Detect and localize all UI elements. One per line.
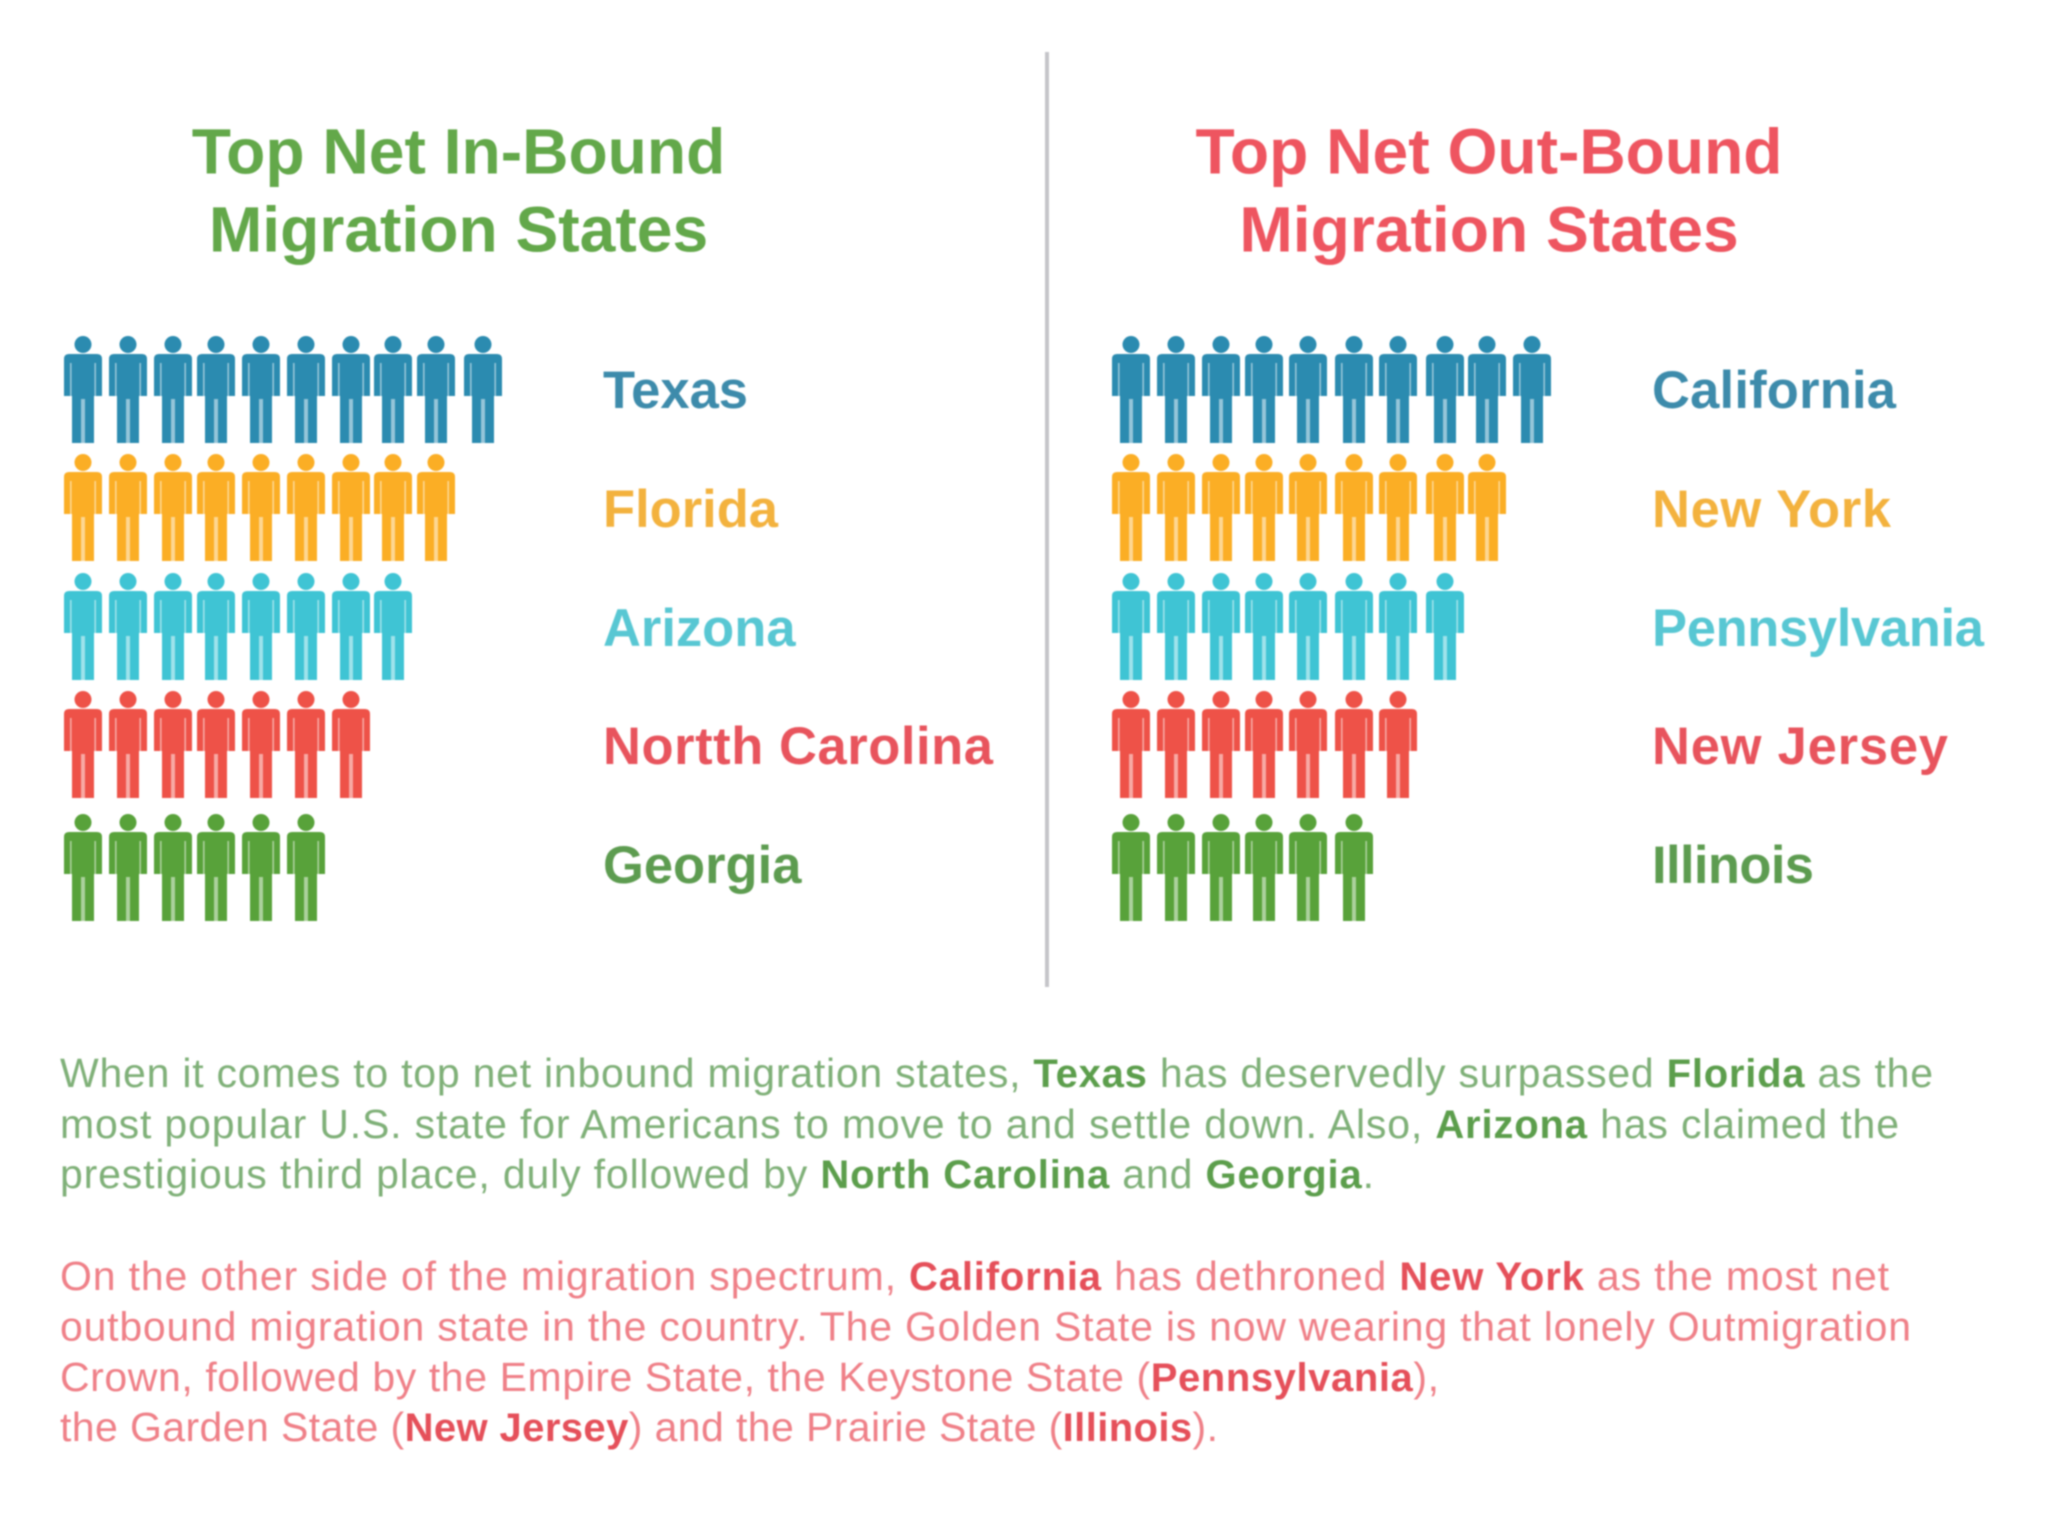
text block: out-bound summary: the Garden State (New Jersey) and the Prairie State (Illinois). (60, 1404, 1218, 1450)
row: North Carolina, 7 people (64, 691, 370, 798)
heading: out-bound: Top Net Out-Bound (1195, 116, 1783, 188)
heading: in-bound: Migration States (209, 194, 708, 266)
text block: in-bound summary: When it comes to top net inbound migration states, Texas has deservedly surpassed Florida as the (60, 1050, 1933, 1096)
row: Georgia, 6 people (64, 814, 325, 921)
text block: out-bound summary: outbound migration state in the country. The Golden State is now wearing that lonely Outmigration (60, 1304, 1911, 1350)
row: California, 10 people (1112, 336, 1551, 443)
text block: in-bound summary: most popular U.S. state for Americans to move to and settle down. Also, Arizona has claimed the (60, 1101, 1899, 1147)
pictogram: in-bound states (64, 336, 502, 921)
text block: in-bound summary: prestigious third place, duly followed by North Carolina and Georgia. (60, 1151, 1374, 1197)
labels: in-bound states: Arizona (603, 599, 796, 658)
pictogram: out-bound states (1112, 336, 1551, 921)
labels: out-bound states: New York (1652, 480, 1892, 539)
text block: out-bound summary (60, 1253, 1911, 1450)
labels: out-bound states: Illinois (1652, 836, 1814, 895)
row: Pennsylvania, 8 people (1112, 573, 1464, 680)
labels: in-bound states: Georgia (603, 836, 802, 895)
row: Florida, 9 people (64, 454, 455, 561)
row: New Jersey, 7 people (1112, 691, 1417, 798)
labels: out-bound states (1652, 361, 1985, 895)
labels: out-bound states: New Jersey (1652, 717, 1948, 776)
heading: out-bound: Migration States (1239, 194, 1739, 266)
divider (1045, 52, 1049, 987)
labels: out-bound states: Pennsylvania (1652, 599, 1985, 658)
heading: in-bound: Top Net In-Bound (192, 116, 725, 188)
row: Arizona, 8 people (64, 573, 412, 680)
row: Texas, 10 people (64, 336, 502, 443)
text block: in-bound summary (60, 1050, 1933, 1197)
row: Illinois, 6 people (1112, 814, 1373, 921)
heading: in-bound (192, 116, 725, 266)
labels: in-bound states: Nortth Carolina (603, 717, 994, 776)
row: New York, 9 people (1112, 454, 1506, 561)
text block: out-bound summary: On the other side of the migration spectrum, California has dethroned New York as the most net (60, 1253, 1890, 1299)
labels: in-bound states: Florida (603, 480, 779, 539)
labels: out-bound states: California (1652, 361, 1897, 420)
heading: out-bound (1195, 116, 1783, 266)
text block: out-bound summary: Crown, followed by the Empire State, the Keystone State (Pennsylvania), (60, 1354, 1439, 1400)
labels: in-bound states: Texas (603, 361, 748, 420)
labels: in-bound states (603, 361, 994, 895)
